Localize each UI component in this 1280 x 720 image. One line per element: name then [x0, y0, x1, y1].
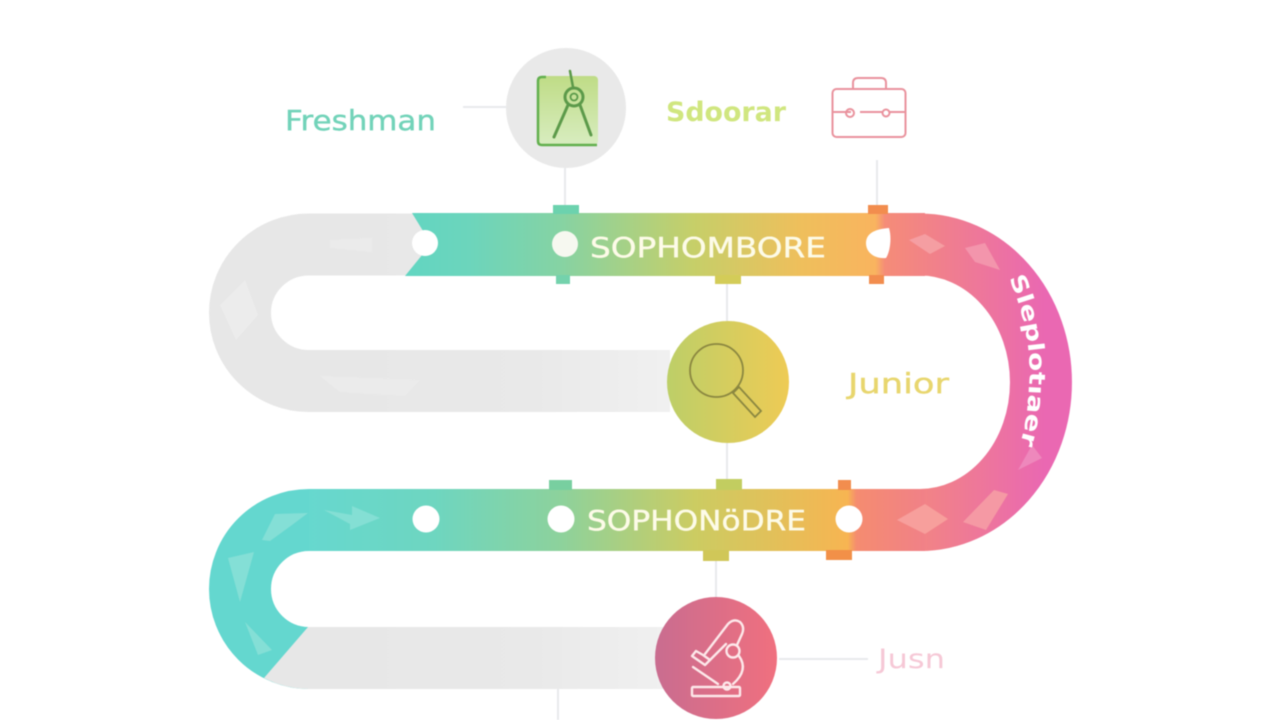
lower teal curve: [240, 520, 340, 658]
icon: microscope disc: [655, 597, 777, 719]
label: Freshman: Freshman: [285, 104, 436, 137]
label: Scholar: Sdoorar: [666, 97, 787, 128]
tabs on the bands: [549, 205, 888, 561]
waypoint dots: [412, 228, 890, 532]
icon: magnifier disc: [667, 321, 789, 443]
upper grey track: [240, 244, 670, 381]
label: Junior: Junior: [845, 367, 950, 400]
faint arrows on the tracks: [220, 234, 1042, 655]
curved heading on right bend: Sleplotıaer: [1010, 274, 1046, 448]
label: Juan: Jusn: [876, 644, 945, 675]
connector lines: [463, 107, 877, 720]
band heading: top: SOPHOMBORE: [590, 231, 826, 264]
band heading: lower: SOPHONöDRE: [587, 504, 806, 537]
top gradient band: [405, 213, 925, 276]
right pink curve: [920, 244, 1041, 520]
lower gradient band: [309, 489, 925, 551]
icon: briefcase: [832, 78, 906, 137]
icon: book and compass: [506, 48, 626, 168]
lower grey track: [264, 627, 665, 689]
